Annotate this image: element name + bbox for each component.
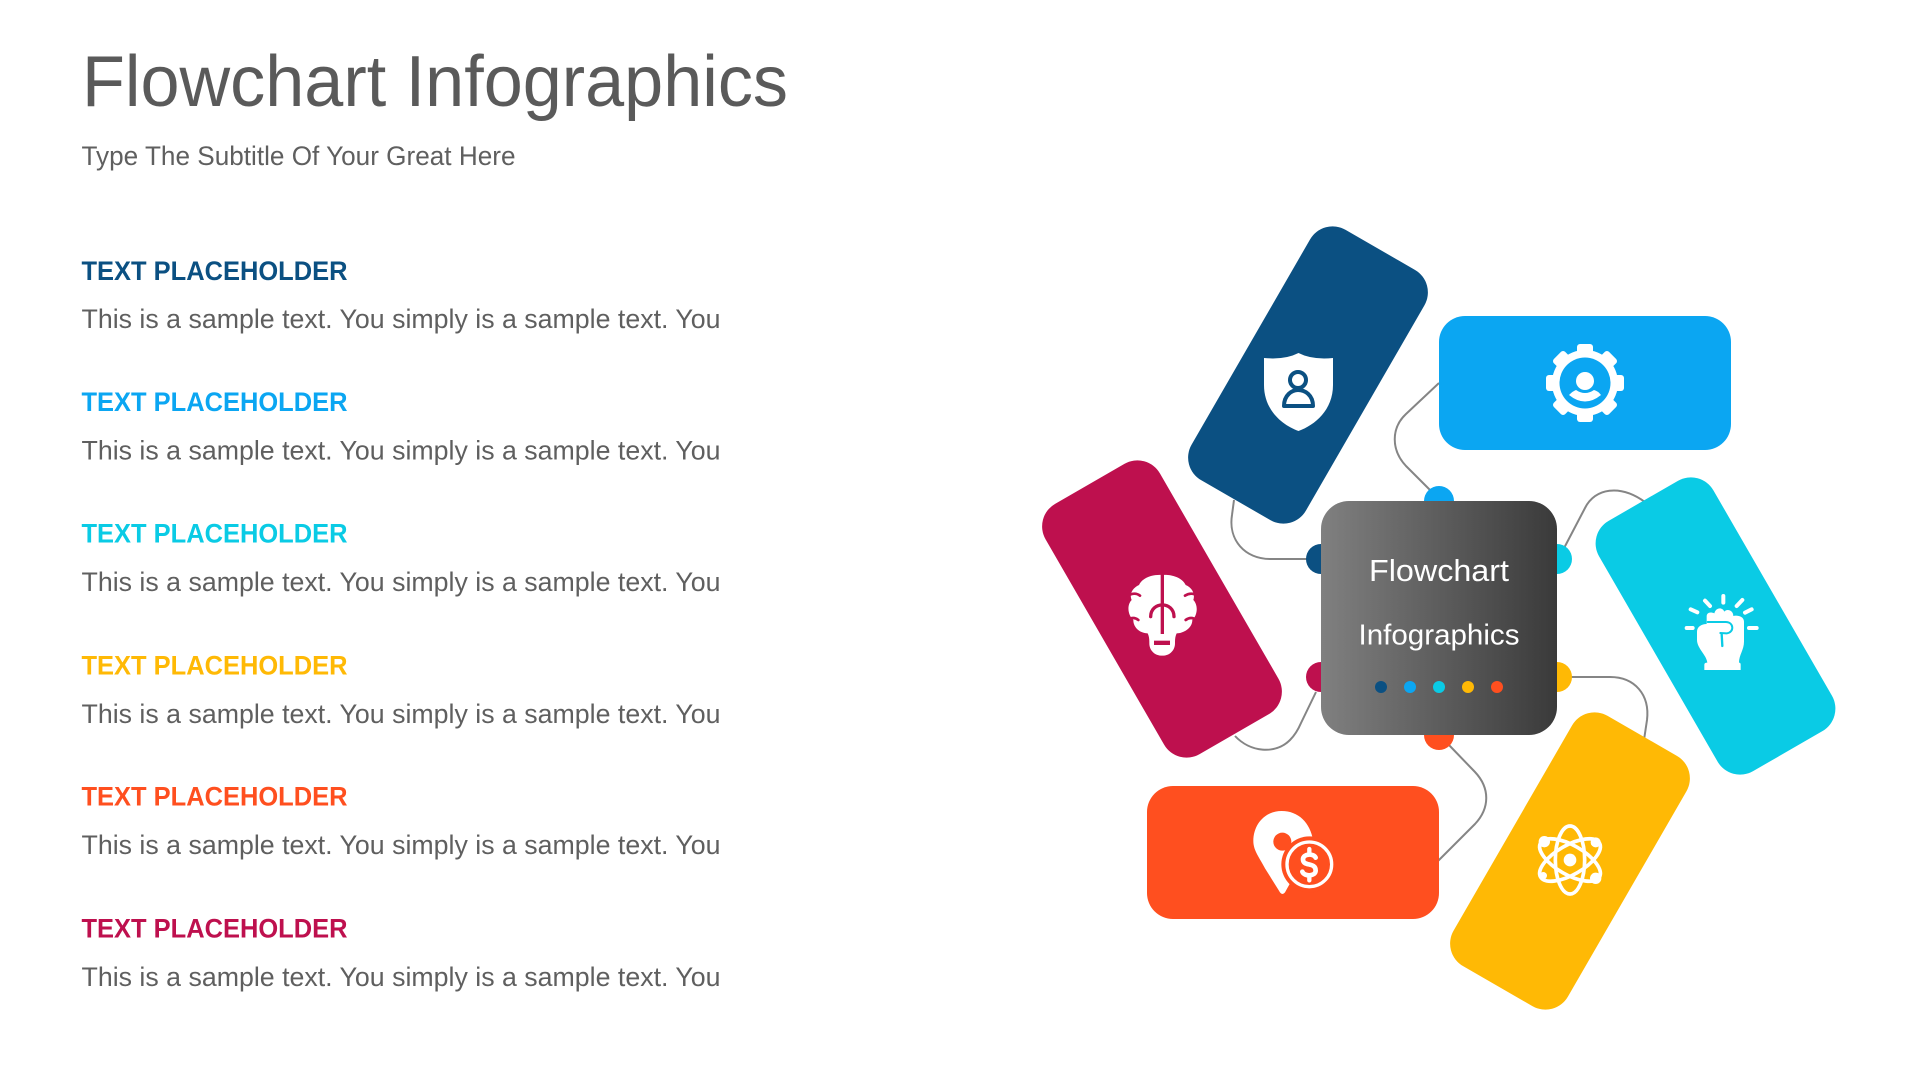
list item 1 — [82, 256, 720, 334]
icon: brain bulb with arrow — [1128, 574, 1198, 656]
title: Flowchart Infographics — [82, 42, 788, 122]
list item 4 — [82, 650, 720, 729]
colour dots — [1375, 681, 1503, 693]
list item 5: This is a sample text. You simply is a sample text. You — [82, 830, 720, 860]
icon: atom — [1533, 826, 1607, 894]
panel: blue card — [1439, 316, 1731, 450]
list item 4: TEXT PLACEHOLDER — [82, 650, 348, 680]
panel: cyan card — [1586, 468, 1845, 784]
list item 5 — [82, 782, 720, 860]
icon: gear with person — [1546, 344, 1624, 422]
icon: raised fist — [1687, 596, 1757, 670]
list item 2: This is a sample text. You simply is a sample text. You — [82, 436, 720, 466]
centre title — [1358, 553, 1520, 652]
list item 4: This is a sample text. You simply is a sample text. You — [82, 699, 720, 729]
list item 6 — [82, 914, 720, 992]
list item 3: TEXT PLACEHOLDER — [82, 518, 348, 548]
list item 1: This is a sample text. You simply is a sample text. You — [82, 304, 720, 334]
panel: yellow card — [1441, 703, 1699, 1019]
panel: centre box — [1321, 501, 1557, 735]
list item 3: This is a sample text. You simply is a sample text. You — [82, 567, 720, 597]
connector lines — [1231, 383, 1647, 863]
centre title: Infographics — [1358, 620, 1520, 652]
panel: navy card — [1179, 217, 1437, 533]
icon: shield with person — [1264, 353, 1333, 431]
centre title: Flowchart — [1369, 553, 1509, 588]
connector dots — [1306, 486, 1572, 750]
list item 3 — [82, 518, 720, 597]
list item 5: TEXT PLACEHOLDER — [82, 782, 348, 812]
subtitle: Type The Subtitle Of Your Great Here — [82, 141, 516, 171]
list item 6: TEXT PLACEHOLDER — [82, 914, 348, 944]
panel: orange card — [1147, 786, 1439, 919]
icon: location pin with dollar — [1253, 811, 1337, 894]
list item 2: TEXT PLACEHOLDER — [82, 387, 348, 417]
panel: crimson card — [1033, 451, 1291, 767]
list item 6: This is a sample text. You simply is a sample text. You — [82, 962, 720, 992]
list item 2 — [82, 387, 720, 466]
list item 1: TEXT PLACEHOLDER — [82, 256, 348, 286]
